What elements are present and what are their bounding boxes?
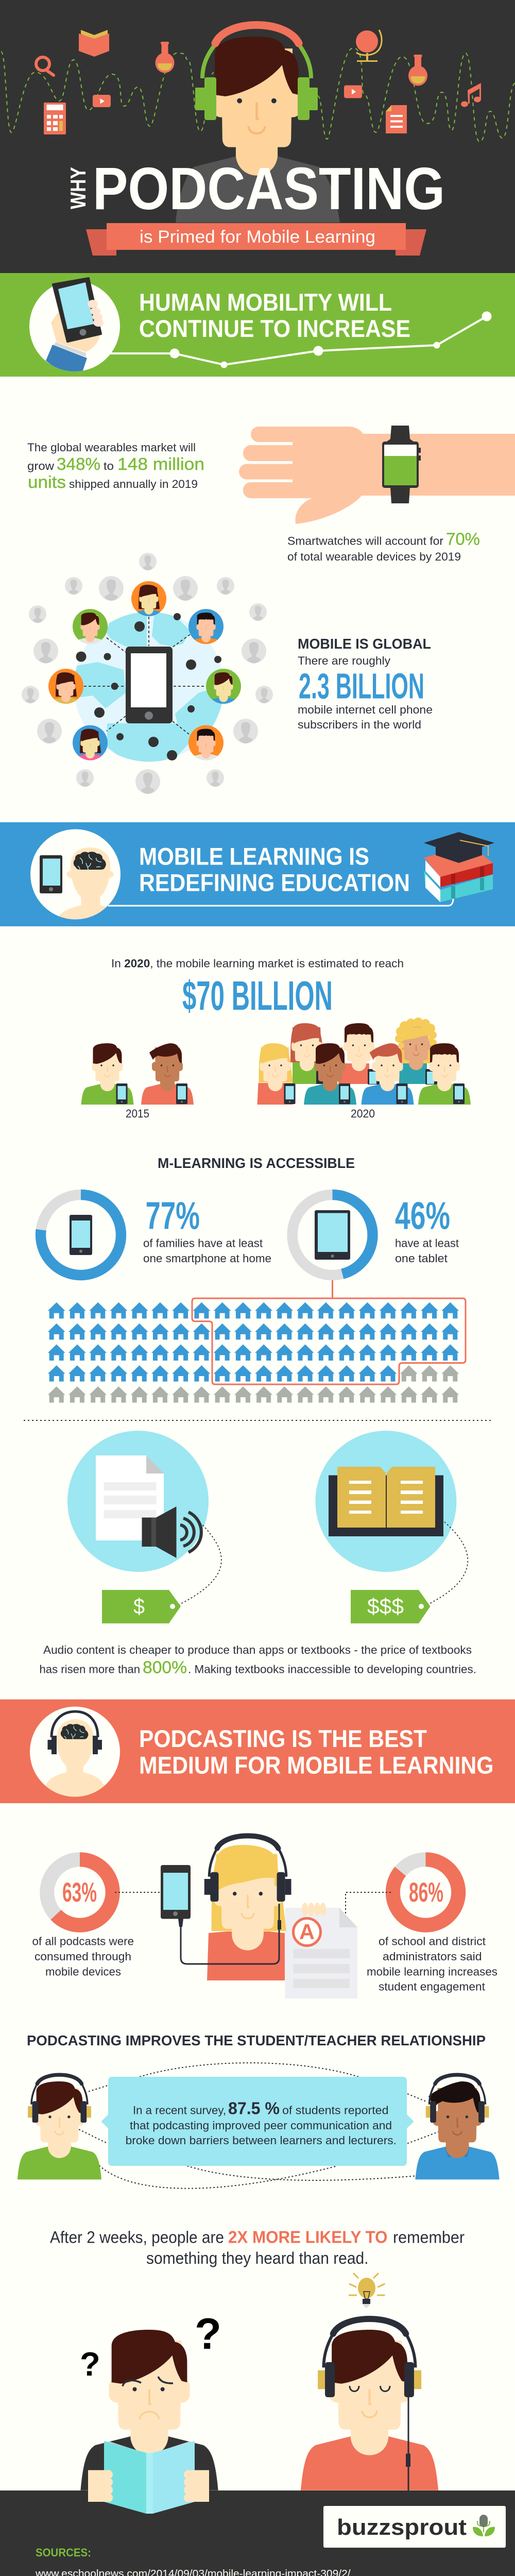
text: mobile is global: MOBILE IS GLOBAL: [298, 636, 431, 652]
illustration: wrist with smartwatch: [239, 426, 515, 524]
icon: lightbulb: [349, 2273, 385, 2308]
text: two weeks: 2X MORE LIKELY TO: [228, 2227, 387, 2246]
text: smartwatches: of total wearable devices by 2019: [287, 550, 461, 563]
stat: 46 percent: have at least: [395, 1237, 459, 1250]
heading: student teacher relationship: PODCASTING IMPROVES THE STUDENT/TEACHER RELATIONSHIP: [27, 2032, 486, 2048]
text: mobile is global: [298, 636, 433, 731]
text: administrators: [367, 1935, 497, 1993]
chart line: rising mobility: [110, 311, 491, 368]
text: mobile is global: subscribers in the world: [298, 718, 421, 731]
text: audio content: Audio content is cheaper to produce than apps or textbooks - the price of textbooks: [43, 1643, 472, 1656]
price tag: textbook: [351, 1590, 431, 1623]
heading: HUMAN MOBILITY WILL: [139, 289, 392, 316]
sources: [35, 2546, 439, 2576]
price tag: audio: $: [133, 1594, 145, 1618]
text: mobile is global: There are roughly: [298, 654, 390, 667]
illustration: paper with grade: A: [299, 1920, 315, 1944]
dotted relationship loops: [79, 2063, 438, 2189]
text: mobile is global: mobile internet cell phone: [298, 703, 433, 716]
text: wearables market: [27, 441, 204, 492]
callout: survey: broke down barriers between learners and lecturers.: [126, 2134, 397, 2147]
icon: phone with cord: [161, 1865, 281, 1964]
text: smartwatches: [287, 530, 480, 563]
illustration: gray avatars: [22, 553, 273, 794]
text: podcasts consumed: [32, 1935, 134, 1978]
text: two weeks: something they heard than read.: [146, 2249, 369, 2267]
text: wearables market: units: [28, 472, 66, 492]
text: wearables market: grow: [27, 460, 54, 472]
callout: survey: [101, 2077, 414, 2166]
heading: PODCASTING IS THE BEST: [139, 1725, 427, 1752]
icon: magnifier: [36, 57, 54, 75]
callout: survey: 87.5 %: [228, 2099, 280, 2118]
text: wearables market: to: [104, 460, 114, 472]
icon: smartphone: [70, 1215, 92, 1255]
panel: footer: [0, 2273, 515, 2576]
chart: donut 86 percent: 86%: [409, 1877, 443, 1908]
text: administrators: of school and district: [379, 1935, 486, 1947]
reader figure: [80, 2330, 218, 2514]
dotted tag strings: [176, 1522, 468, 1606]
label: 2020: 2020: [351, 1107, 375, 1120]
listener figure: [301, 2319, 438, 2490]
outline: tablet share: [192, 1280, 466, 1384]
text: audio content: [39, 1643, 476, 1676]
heading: [139, 843, 410, 896]
text: administrators: administrators said: [383, 1950, 482, 1963]
label: 2015: 2015: [126, 1107, 149, 1120]
icon: phone and brain: [30, 829, 121, 925]
icon: head with headphones: [30, 1706, 120, 1798]
text: two weeks: [50, 2227, 465, 2267]
text: podcasts consumed: of all podcasts were: [32, 1935, 134, 1947]
icon: left play button: [93, 95, 111, 107]
connection lines: [84, 617, 206, 734]
icon: document: [386, 105, 407, 133]
chart: donut 46 percent: [293, 1195, 373, 1275]
stat: 46 percent: 46%: [395, 1194, 450, 1238]
panel: human mobility band: [0, 273, 515, 377]
panel: mobile learning band: [0, 822, 515, 926]
icon: globe: [356, 30, 382, 62]
avatars: connected people: [48, 581, 241, 767]
price tag: textbook: $$$: [367, 1594, 404, 1618]
stat: 77 percent: 77%: [145, 1194, 200, 1238]
heading: [139, 1725, 493, 1778]
chart: donut 77 percent: [41, 1195, 121, 1275]
text: two weeks: remember: [393, 2228, 465, 2246]
ribbon: subtitle: [86, 223, 426, 256]
question marks: ?: [80, 2345, 100, 2383]
stat: 77 percent: of families have at least: [143, 1237, 263, 1250]
stat: 77 percent: one smartphone at home: [143, 1252, 271, 1265]
callout: survey: of students reported: [282, 2104, 388, 2117]
icon: central phone: [126, 647, 173, 723]
panel: header: [0, 0, 515, 273]
connector line: [108, 899, 453, 906]
chart: house pictogram: [48, 1280, 466, 1402]
sources: SOURCES:: [36, 2546, 91, 2559]
question marks: [80, 2310, 221, 2383]
illustration: audio document: [67, 1431, 209, 1572]
text: administrators: student engagement: [379, 1980, 485, 1993]
text: audio content: . Making textbooks inaccessible to developing countries.: [188, 1663, 476, 1675]
network dots: [76, 613, 221, 760]
heading: REDEFINING EDUCATION: [139, 869, 410, 896]
icon: hand holding phone: [29, 278, 120, 374]
ribbon: subtitle: is Primed for Mobile Learning: [140, 227, 375, 247]
question marks: ?: [195, 2310, 221, 2359]
text: smartwatches: Smartwatches will account for: [287, 535, 443, 547]
illustration: woman with headphones: [204, 1836, 291, 1980]
text: audio content: has risen more than: [39, 1663, 140, 1675]
logo: buzzsprout: [323, 2506, 506, 2548]
student figure: [18, 2075, 101, 2179]
panel: podcasting band: [0, 1699, 515, 1803]
back row: students: [290, 1018, 437, 1084]
callout: survey: that podcasting improved peer communication and: [130, 2119, 392, 2132]
icon: right flask: [408, 55, 427, 86]
text: smartwatches: 70%: [446, 530, 480, 548]
chart: donut 86 percent: [393, 1859, 458, 1925]
text: two weeks: After 2 weeks, people are: [50, 2228, 224, 2246]
text: administrators: mobile learning increases: [367, 1965, 497, 1978]
icon: left flask: [156, 42, 174, 73]
heading: CONTINUE TO INCREASE: [139, 315, 410, 342]
icon: books and graduation cap: [424, 832, 494, 902]
icon: calculator: [44, 103, 66, 134]
text: wearables market: shipped annually in 2019: [69, 478, 198, 490]
title: why podcasting: WHY: [66, 167, 90, 209]
front row: students: [258, 1043, 471, 1105]
illustration: students 2015: [81, 1043, 194, 1105]
dotted connectors: [115, 1892, 391, 1916]
chart: donut 63 percent: 63%: [62, 1877, 97, 1908]
icon: book: [79, 30, 109, 57]
teacher figure: [415, 2075, 500, 2179]
stat: 46 percent: [395, 1194, 459, 1265]
stat: 70 billion: $70 BILLION: [182, 973, 333, 1019]
title: why podcasting: PODCASTING: [93, 155, 445, 222]
callout: survey: In a recent survey,: [133, 2104, 226, 2117]
icon: tablet: [315, 1210, 350, 1260]
divider: [24, 1420, 492, 1421]
text: market estimate: In 2020, the mobile learning market is estimated to reach: [111, 957, 404, 970]
text: mobile is global: 2.3 BILLION: [299, 666, 424, 706]
price tag: audio: [102, 1590, 181, 1623]
text: wearables market: 348%: [57, 454, 100, 473]
logo: buzzsprout: buzzsprout: [337, 2515, 467, 2540]
stat: 46 percent: one tablet: [395, 1252, 448, 1265]
illustration: students 2020: [258, 1018, 471, 1105]
icon: right play button: [344, 86, 362, 98]
chart: donut 63 percent: [47, 1859, 113, 1925]
text: podcasts consumed: consumed through: [35, 1950, 131, 1963]
text: audio content: 800%: [143, 1658, 187, 1676]
stat: 77 percent: [143, 1194, 271, 1265]
text: wearables market: 148 million: [117, 454, 204, 473]
icon: music note: [461, 83, 481, 107]
text: podcasts consumed: mobile devices: [45, 1965, 121, 1978]
heading: [139, 289, 410, 342]
heading: m-learning: M-LEARNING IS ACCESSIBLE: [158, 1155, 355, 1171]
illustration: paper with grade: [285, 1903, 357, 1998]
book: [104, 2441, 195, 2514]
illustration: globe: [74, 612, 225, 764]
illustration: textbook: [315, 1431, 456, 1572]
heading: MOBILE LEARNING IS: [139, 843, 369, 870]
illustration: man with headphones: [176, 25, 340, 223]
text: wearables market: The global wearables market will: [27, 441, 196, 454]
